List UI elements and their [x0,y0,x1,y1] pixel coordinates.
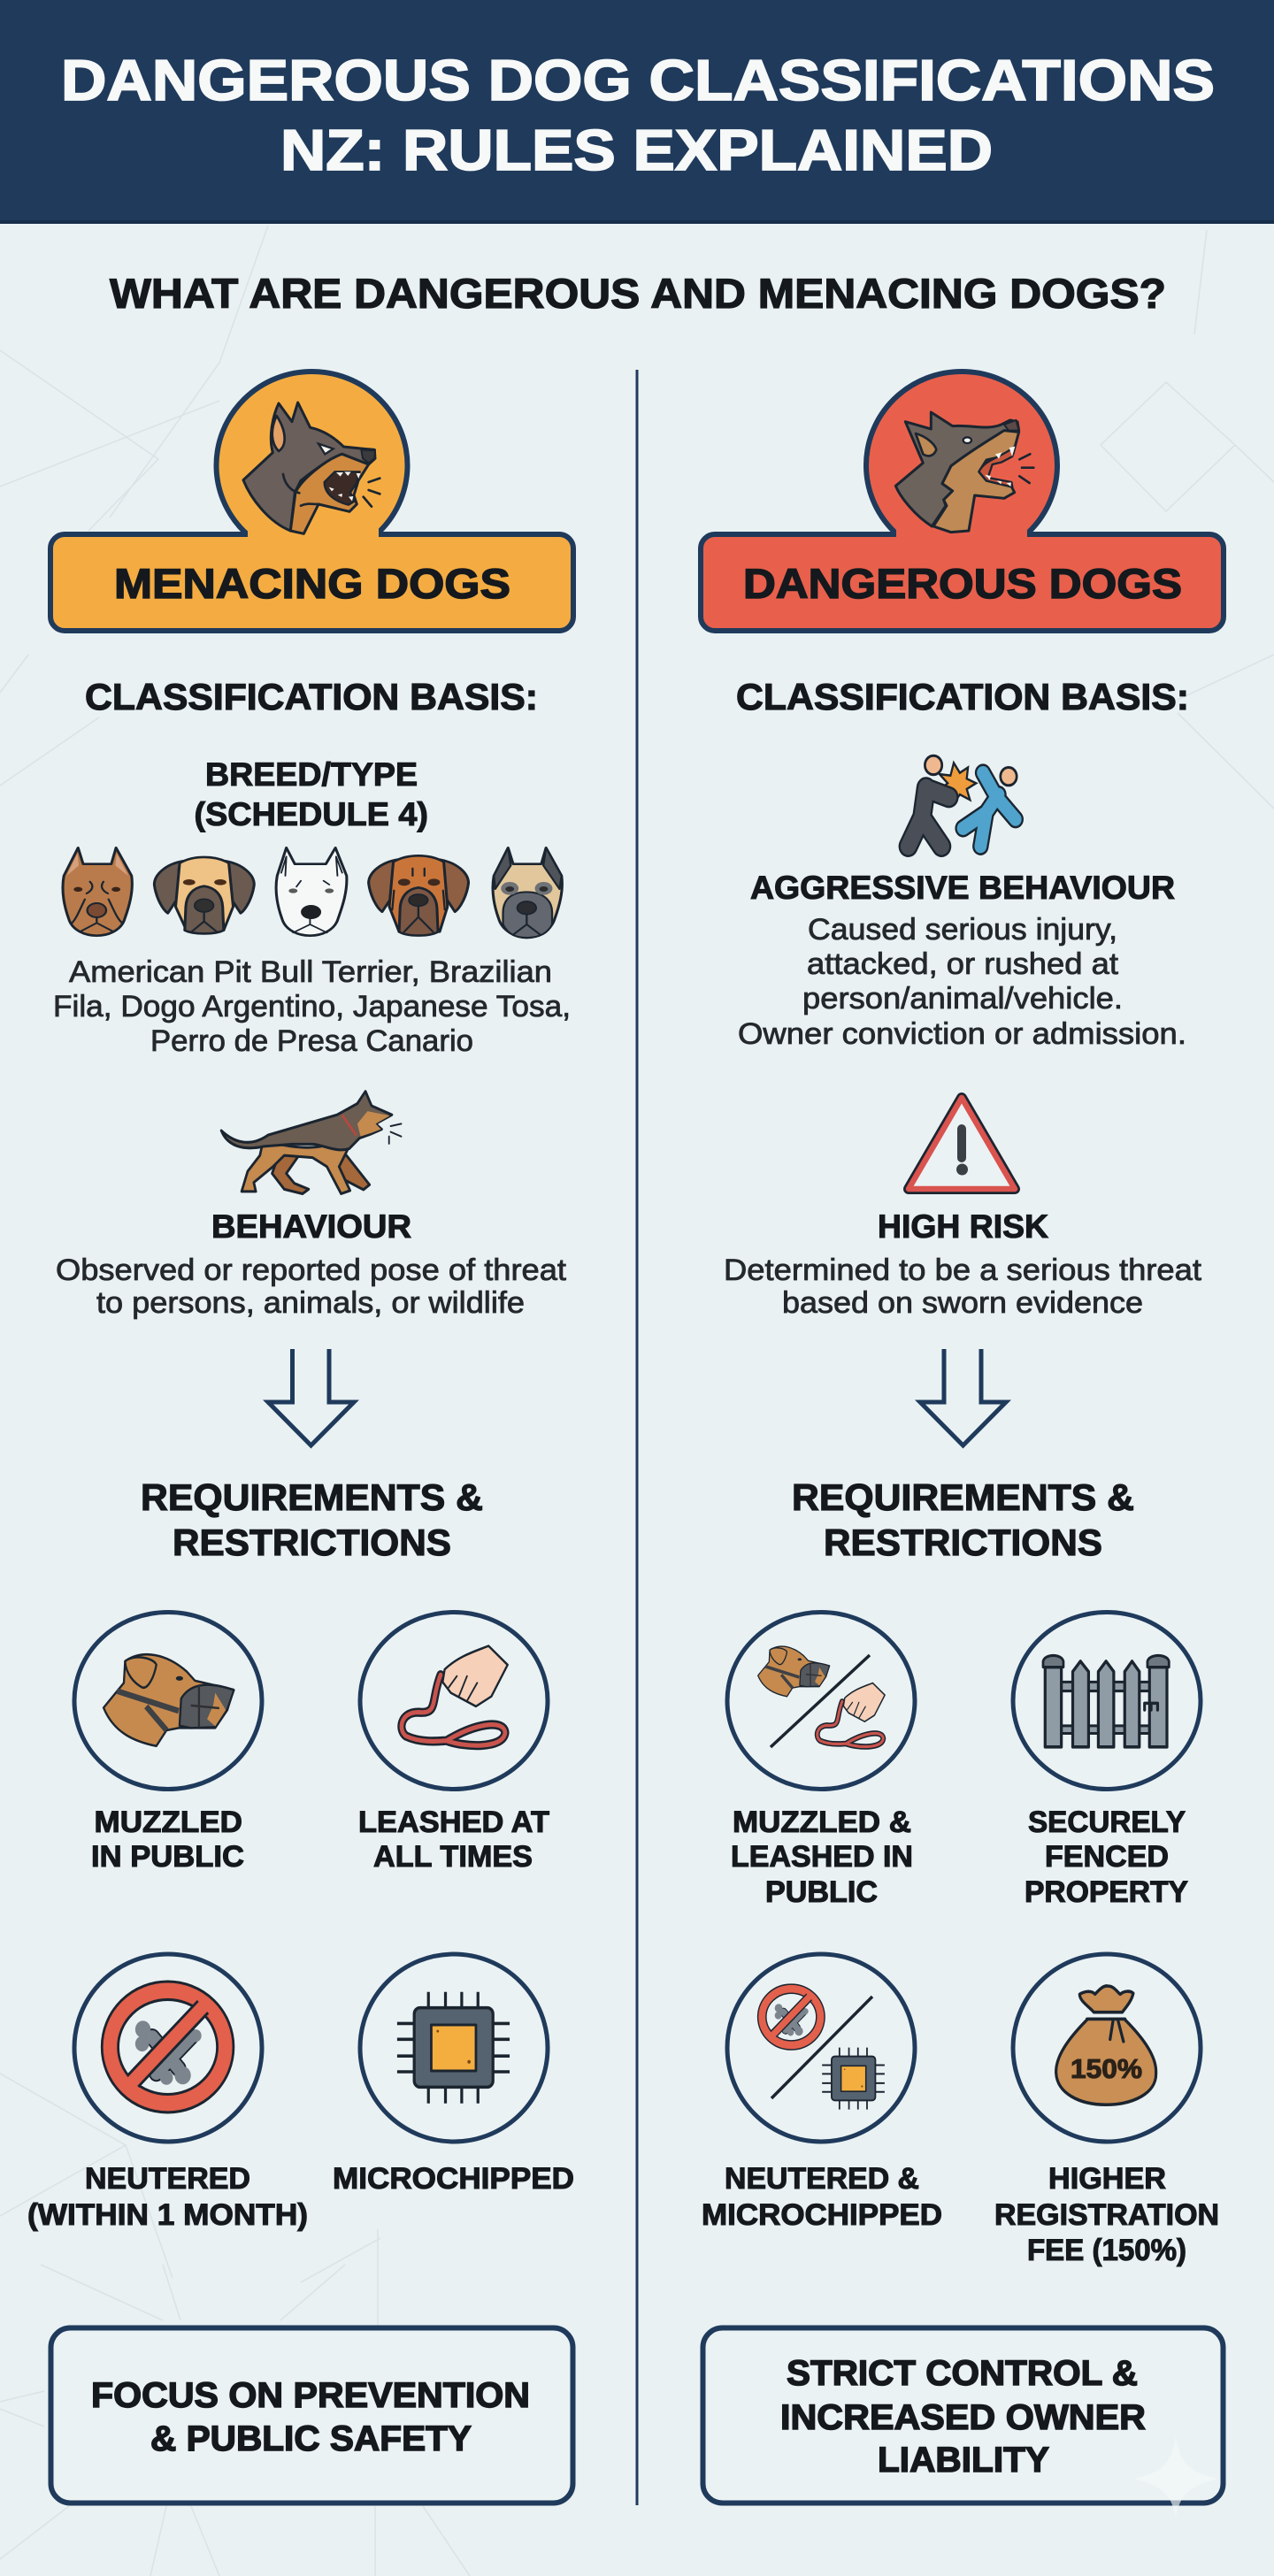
label: NEUTERED [85,2162,250,2196]
arrow down [920,1349,1006,1445]
aggressive behaviour text: Owner conviction or admission. [738,1017,1186,1051]
icon: american pit bull terrier [63,847,132,936]
centre divider [635,370,639,2505]
separator slash [771,1997,872,2098]
badge label: MENACING DOGS [114,560,510,607]
title: NZ: RULES EXPLAINED [280,118,993,182]
heading: classification basis: CLASSIFICATION BASIS: [736,676,1189,717]
label [731,1806,913,1909]
icon: money bag: 150% [1071,2053,1142,2084]
label [1025,1806,1188,1909]
label [994,2162,1219,2267]
label [702,2162,942,2232]
label: MICROCHIPPED [333,2162,574,2196]
icon: fence [1043,1655,1169,1747]
icon: chip small [822,2048,885,2110]
label [358,1806,549,1874]
aggressive behaviour text: attacked, or rushed at [807,947,1119,981]
aggressive behaviour text [738,913,1186,1051]
breed heading: BREED/TYPE [205,756,418,793]
icon: howling dog head [895,412,1033,533]
badge label: DANGEROUS DOGS [743,560,1182,607]
item: securely fenced property [1013,1612,1201,1909]
item: higher registration fee [994,1954,1219,2267]
badge: dangerous dogs [701,372,1224,631]
icon: leash small [817,1683,885,1747]
aggressive behaviour text: Caused serious injury, [808,913,1117,947]
callout: strict control: STRICT CONTROL & [787,2354,1138,2393]
title: DANGEROUS DOG CLASSIFICATIONS [61,48,1215,112]
heading: requirements and restrictions [792,1476,1134,1563]
label: LEASHED AT [358,1806,549,1839]
icon: japanese tosa [369,855,469,936]
label: PUBLIC [765,1875,878,1909]
icon: brazilian fila [154,857,254,933]
panel: menacing dogs [27,372,574,2503]
behaviour text [56,1254,567,1320]
label: LEASHED IN [731,1840,913,1874]
breed list text: Fila, Dogo Argentino, Japanese Tosa, [53,990,571,1024]
high risk text [724,1254,1202,1320]
label: REGISTRATION [994,2198,1219,2232]
label: MUZZLED [94,1806,242,1839]
callout: prevention: FOCUS ON PREVENTION [91,2376,530,2415]
label [91,1806,244,1874]
callout: prevention [51,2328,573,2503]
icon: perro de presa canario [493,847,562,938]
label: ALL TIMES [373,1840,533,1874]
separator slash [771,1655,870,1747]
icon: no bone small [762,1989,820,2045]
label: SECURELY [1028,1806,1186,1839]
icon: warning triangle [909,1098,1015,1189]
heading: requirements and restrictions: REQUIREMENTS & [141,1476,483,1518]
icon: hand and leash [402,1646,508,1745]
badge: menacing dogs [50,372,573,631]
callout: strict control: INCREASED OWNER [780,2398,1146,2437]
arrow down [268,1349,354,1445]
breed list text: American Pit Bull Terrier, Brazilian [69,955,552,989]
callout: prevention: & PUBLIC SAFETY [150,2419,472,2458]
label: FEE (150%) [1027,2234,1186,2267]
heading: requirements and restrictions: REQUIREMENTS & [792,1476,1134,1518]
callout: strict control: LIABILITY [878,2441,1049,2480]
item: muzzled and leashed in public [727,1612,915,1909]
aggressive behaviour heading: AGGRESSIVE BEHAVIOUR [750,870,1175,906]
behaviour text: to persons, animals, or wildlife [96,1286,525,1320]
label: NEUTERED & [725,2162,919,2196]
behaviour text: Observed or reported pose of threat [56,1254,567,1287]
callout: strict control [702,2328,1223,2503]
behaviour heading: BEHAVIOUR [211,1208,411,1245]
item: neutered [27,1954,308,2232]
title [61,48,1215,182]
item: neutered and microchipped [702,1954,942,2232]
high risk text: based on sworn evidence [782,1286,1143,1320]
breed heading: (SCHEDULE 4) [195,796,428,832]
heading: requirements and restrictions: RESTRICTIONS [824,1522,1102,1563]
aggressive behaviour text: person/animal/vehicle. [802,982,1123,1016]
label [27,2162,308,2232]
icon: microchip [397,1992,510,2104]
breed list text [53,955,571,1058]
heading: requirements and restrictions [141,1476,483,1563]
icon: money bag [1056,1986,1156,2104]
breed heading [195,756,428,832]
label: PROPERTY [1025,1875,1188,1909]
sparkle watermark [1133,2434,1218,2518]
section heading: WHAT ARE DANGEROUS AND MENACING DOGS? [110,270,1166,317]
label: FENCED [1045,1840,1169,1874]
high risk text: Determined to be a serious threat [724,1254,1202,1287]
header banner [0,0,1274,224]
item: muzzled in public [74,1612,262,1874]
icon: dogo argentino [276,847,347,936]
icon: person attacking person [909,755,1017,847]
item: microchipped [333,1954,574,2196]
icon: no bone prohibition [110,1990,226,2104]
icons: five dog breed heads [63,847,562,938]
label: HIGHER [1048,2162,1166,2196]
panel: dangerous dogs [701,372,1224,2503]
breed list text: Perro de Presa Canario [150,1024,473,1058]
high risk heading: HIGH RISK [878,1208,1048,1245]
label: MICROCHIPPED [702,2198,942,2232]
icon: barking dog [221,1092,401,1193]
icon: muzzle small [758,1646,830,1697]
item: leashed at all times [358,1612,549,1874]
label: MUZZLED & [733,1806,911,1839]
heading: requirements and restrictions: RESTRICTIONS [173,1522,451,1563]
heading: classification basis: CLASSIFICATION BASIS: [85,676,538,717]
icon: snarling dog head [243,402,380,533]
label: (WITHIN 1 MONTH) [27,2198,308,2232]
icon: muzzle [104,1654,234,1746]
label: IN PUBLIC [91,1840,244,1874]
